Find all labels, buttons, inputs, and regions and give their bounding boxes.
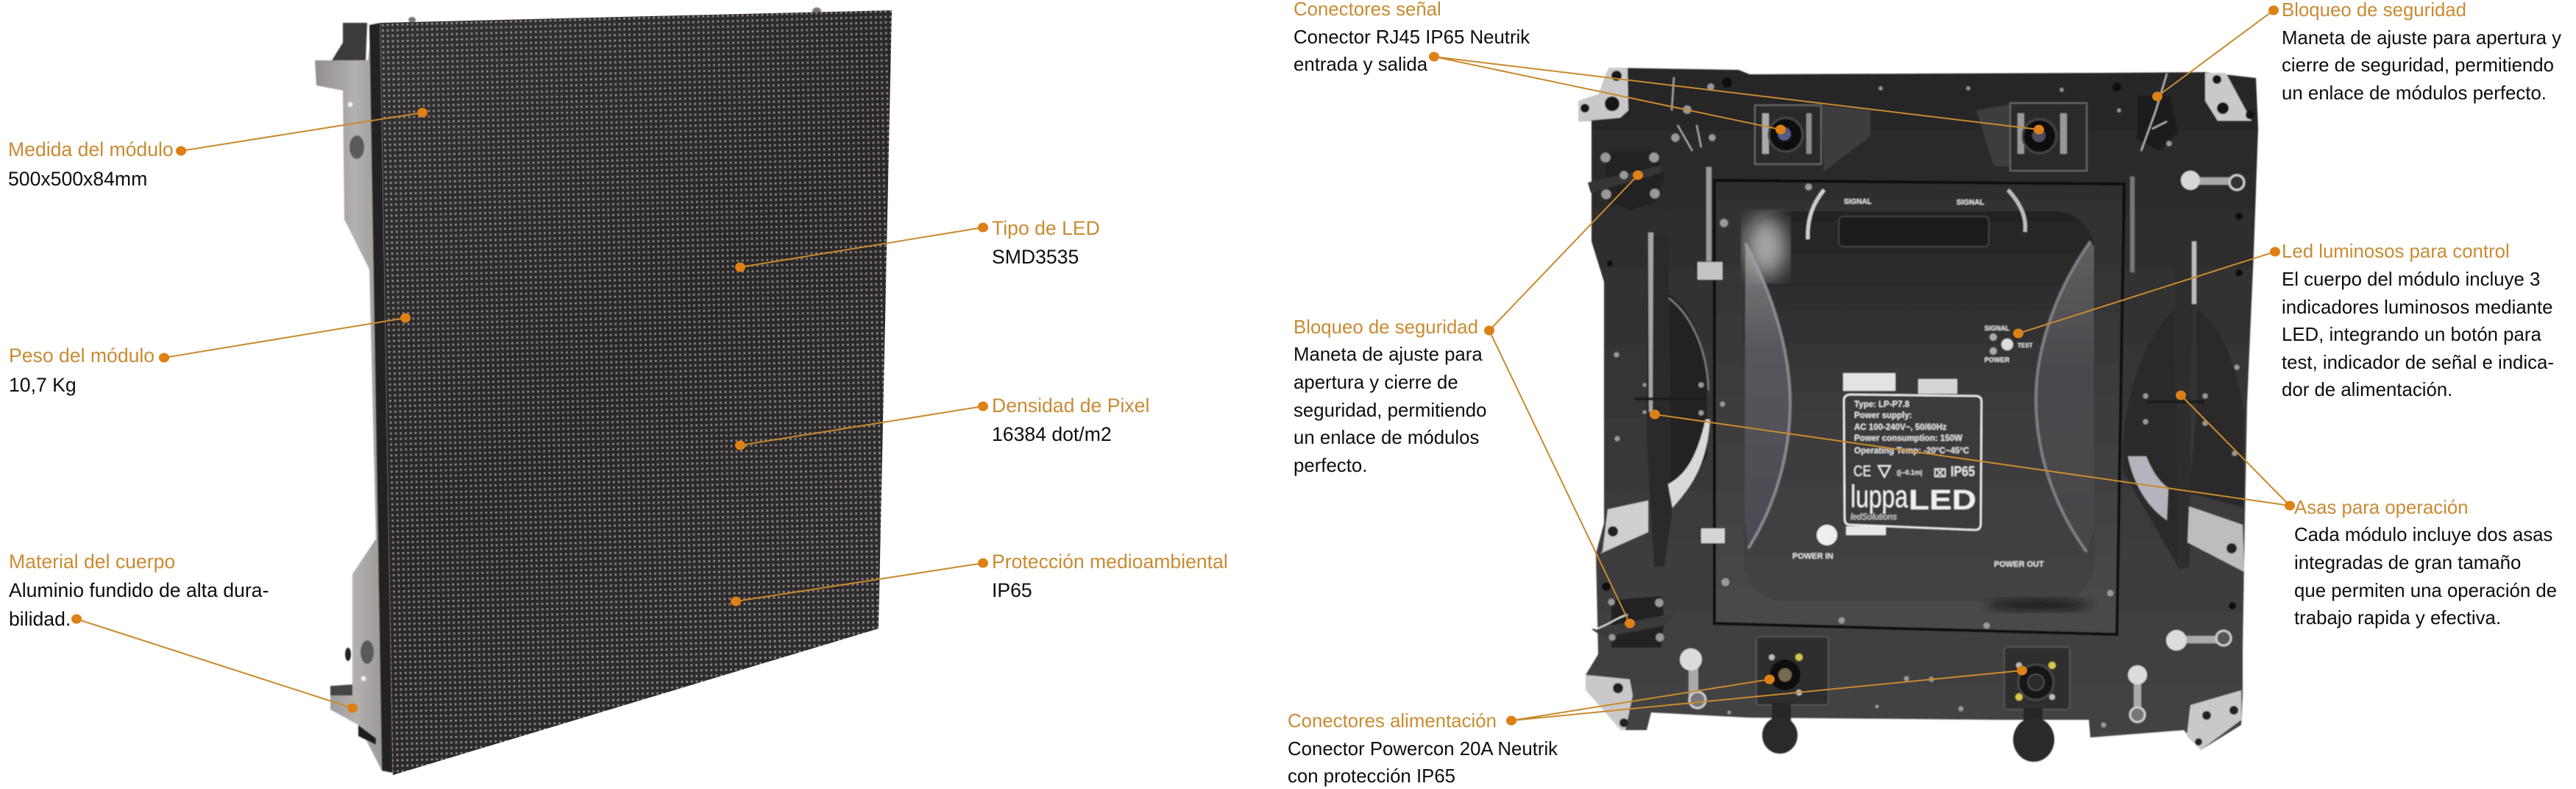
- control indicators: TEST: [2018, 342, 2033, 349]
- product label: Type: LP-P7.8: [1854, 400, 1910, 409]
- back plate: [1706, 167, 2135, 634]
- LED face: [380, 10, 892, 775]
- callout: Conectores señal: [1294, 0, 2044, 134]
- callout: Material del cuerpo: bilidad.: [9, 608, 71, 630]
- callout: Led luminosos para control: indicadores luminosos mediante: [2282, 297, 2553, 318]
- right handle: [2122, 241, 2244, 572]
- product label: AC 100-240V~, 50/60Hz: [1854, 423, 1947, 432]
- plate print labels: SIGNAL: [1956, 199, 1984, 207]
- callout: Bloqueo de seguridad right: Maneta de ajuste para apertura y: [2282, 28, 2561, 49]
- callout: Led luminosos para control: LED, integrando un botón para: [2282, 325, 2541, 345]
- callout: Material del cuerpo: Material del cuerpo: [9, 551, 175, 573]
- callout: Asas para operación: [1650, 390, 2557, 629]
- callout: Protección medioambiental: Protección medioambiental: [992, 551, 1228, 573]
- callout: Bloqueo de seguridad right: un enlace de módulos perfecto.: [2282, 83, 2547, 104]
- callout: Led luminosos para control: El cuerpo del módulo incluye 3: [2282, 269, 2540, 290]
- control indicators: POWER: [1984, 356, 2010, 364]
- panel: module back photo: [1578, 68, 2258, 762]
- callout: Asas para operación: Cada módulo incluye dos asas: [2294, 525, 2552, 545]
- callout: Led luminosos para control: Led luminosos para control: [2282, 241, 2510, 262]
- product label: [1844, 394, 1981, 530]
- product label: ledSolutions: [1851, 512, 1897, 522]
- callout: Conectores señal: entrada y salida: [1294, 54, 1428, 75]
- product label: (|--0.1m|: [1897, 469, 1923, 476]
- product label: ⌧: [1934, 467, 1946, 480]
- callout: Bloqueo de seguridad left: Maneta de ajuste para: [1294, 344, 1483, 365]
- rating stickers: [1817, 373, 1957, 545]
- callout: Tipo de LED: [735, 217, 1100, 272]
- callout: Bloqueo de seguridad right: Bloqueo de seguridad: [2282, 0, 2466, 21]
- callout: Conectores señal: Conector RJ45 IP65 Neutrik: [1294, 27, 1530, 48]
- control indicators: [1984, 325, 2033, 364]
- callout: Bloqueo de seguridad left: Bloqueo de seguridad: [1294, 317, 1478, 338]
- callout: Conectores alimentación: [1288, 665, 2027, 787]
- callout: Conectores alimentación: Conector Powercon 20A Neutrik: [1288, 739, 1558, 760]
- callout: Bloqueo de seguridad left: [1294, 171, 1643, 629]
- product label: CE: [1853, 463, 1871, 480]
- product label: luppa: [1851, 479, 1908, 514]
- plate clips: [1697, 262, 1725, 543]
- callout: Bloqueo de seguridad right: cierre de seguridad, permitiendo: [2282, 55, 2554, 76]
- plate print labels: POWER OUT: [1994, 560, 2044, 569]
- plate print labels: SIGNAL: [1844, 198, 1872, 206]
- callout: Protección medioambiental: [731, 551, 1228, 606]
- callout: Peso del módulo: [9, 314, 411, 396]
- signal connectors: [1755, 103, 2087, 171]
- callout: Medida del módulo: 500x500x84mm: [8, 168, 147, 190]
- callout: Led luminosos para control: dor de alimentación.: [2282, 380, 2452, 400]
- callout: Led luminosos para control: [2013, 241, 2554, 400]
- corner brackets: [1578, 68, 2254, 750]
- callout: Bloqueo de seguridad left: seguridad, permitiendo: [1294, 400, 1486, 421]
- module body: [1578, 68, 2258, 750]
- screws: [1600, 83, 2240, 728]
- callout: Protección medioambiental: IP65: [992, 579, 1032, 601]
- callout: Material del cuerpo: Aluminio fundido de alta dura-: [9, 579, 269, 601]
- product label: Power supply:: [1854, 411, 1912, 420]
- product label: IP65: [1951, 464, 1975, 480]
- product label: LED: [1909, 485, 1976, 516]
- plate print labels: [1792, 198, 2044, 569]
- callout: Bloqueo de seguridad left: apertura y cierre de: [1294, 372, 1458, 393]
- product label: Power consumption: 150W: [1854, 434, 1962, 443]
- left handle: [1600, 233, 1710, 567]
- callout: Bloqueo de seguridad right: [2152, 0, 2561, 104]
- callout: Asas para operación: integradas de gran tamaño: [2294, 553, 2521, 573]
- control indicators: SIGNAL: [1984, 325, 2010, 332]
- power connectors: [1756, 637, 2070, 762]
- product label: Operating Temp: -20°C~45°C: [1854, 447, 1969, 456]
- callout: Led luminosos para control: test, indicador de señal e indica-: [2282, 353, 2554, 373]
- callout: Densidad de Pixel: 16384 dot/m2: [992, 423, 1112, 445]
- callout: Asas para operación: trabajo rapida y efectiva.: [2294, 608, 2501, 629]
- callout: Bloqueo de seguridad left: un enlace de módulos: [1294, 428, 1479, 448]
- callout: Peso del módulo: 10,7 Kg: [9, 374, 77, 396]
- security locks: [1588, 74, 2178, 648]
- callout: Medida del módulo: [8, 107, 427, 190]
- dark fixing holes: [1602, 77, 2243, 609]
- alignment pins: [1680, 171, 2244, 722]
- callout: Conectores alimentación: con protección IP65: [1288, 766, 1455, 787]
- callout: Tipo de LED: Tipo de LED: [992, 217, 1100, 239]
- callout: Bloqueo de seguridad left: perfecto.: [1294, 456, 1367, 476]
- callout: Tipo de LED: SMD3535: [992, 246, 1079, 268]
- callout: Densidad de Pixel: Densidad de Pixel: [992, 394, 1149, 417]
- callout: Medida del módulo: Medida del módulo: [8, 138, 174, 160]
- callout: Densidad de Pixel: [735, 394, 1149, 450]
- callout: Asas para operación: Asas para operación: [2294, 498, 2469, 518]
- callout: Asas para operación: que permiten una operación de: [2294, 581, 2557, 601]
- module side frame: [315, 7, 821, 773]
- callout: Conectores alimentación: Conectores alimentación: [1288, 711, 1497, 732]
- callout: Material del cuerpo: [9, 551, 358, 712]
- callout: Peso del módulo: Peso del módulo: [9, 344, 155, 367]
- panel: LED module front photo: [315, 7, 892, 775]
- plate print labels: POWER IN: [1792, 552, 1834, 561]
